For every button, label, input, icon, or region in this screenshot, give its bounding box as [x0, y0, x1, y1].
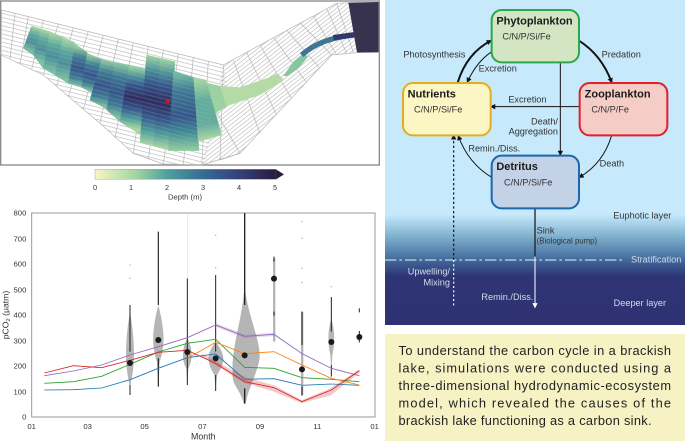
- axis labels: 600: [14, 260, 26, 269]
- axis labels: 11: [313, 422, 321, 431]
- box: Nutrients: C/N/P/Si/Fe: [414, 104, 462, 114]
- axis labels: 09: [256, 422, 264, 431]
- summary text box: three-dimensional hydrodynamic-ecosystem: [398, 378, 671, 393]
- violins: [126, 258, 334, 403]
- observation means: [127, 276, 362, 372]
- depth patches: [23, 26, 355, 151]
- stratification line: [385, 258, 625, 262]
- deep layer labels: Remin./Diss.: [481, 292, 533, 302]
- summary text box: To understand the carbon cycle in a brackish: [398, 343, 671, 358]
- outlet dark cells: [348, 2, 379, 53]
- summary text box: brackish lake functioning as a carbon sink.: [398, 413, 652, 428]
- axis labels: [1, 209, 379, 441]
- colorbar: 0: [93, 183, 97, 192]
- box: Detritus: Detritus: [496, 161, 538, 173]
- plot frame: [32, 213, 375, 417]
- series lines: [44, 325, 359, 402]
- flow labels: Euphotic layer: [613, 211, 671, 221]
- colorbar: 3: [201, 183, 205, 192]
- axis labels: 700: [14, 234, 26, 243]
- flow labels: Death: [600, 158, 624, 168]
- colorbar: 2: [165, 183, 169, 192]
- axis labels: 01: [27, 422, 36, 431]
- flow labels: Aggregation: [509, 127, 558, 137]
- water background: [385, 0, 685, 325]
- axis labels: 03: [83, 422, 92, 431]
- flow labels: (Biological pump): [537, 237, 598, 246]
- series shading: [202, 325, 359, 402]
- axis labels: 2: [6, 318, 12, 321]
- map frame: [1, 1, 379, 165]
- deep layer labels: Deeper layer: [614, 298, 666, 308]
- lake mesh: [0, 3, 357, 165]
- box: Detritus: [492, 156, 579, 208]
- box: Zooplankton: C/N/P/Fe: [591, 104, 629, 114]
- axis labels: 200: [14, 362, 26, 371]
- deep layer labels: [408, 254, 681, 308]
- flow labels: Photosynthesis: [403, 50, 466, 60]
- axis labels: (µatm): [1, 291, 11, 318]
- deep layer labels: Upwelling/: [408, 267, 450, 277]
- flow labels: [403, 50, 671, 246]
- axis labels: 400: [14, 311, 26, 320]
- colorbar: 4: [237, 183, 241, 192]
- box: Nutrients: Nutrients: [408, 88, 456, 100]
- box: Phytoplankton: C/N/P/Si/Fe: [502, 31, 551, 41]
- flow labels: Remin./Diss.: [468, 144, 520, 154]
- colorbar: [93, 169, 284, 202]
- flow labels: Predation: [602, 50, 641, 60]
- box: Nutrients: [403, 83, 491, 135]
- panel: lake depth map: [0, 1, 379, 202]
- axis labels: 100: [14, 387, 26, 396]
- box: Zooplankton: Zooplankton: [585, 88, 651, 100]
- patch mesh overlay: [23, 26, 220, 151]
- deep layer labels: Stratification: [631, 254, 681, 264]
- flow labels: Sink: [537, 226, 555, 236]
- box: Phytoplankton: Phytoplankton: [496, 15, 573, 27]
- axis labels: 05: [140, 422, 149, 431]
- red site marker: [166, 99, 170, 103]
- axis labels: 800: [14, 209, 26, 218]
- colorbar: 1: [129, 183, 133, 192]
- axis labels: 300: [14, 336, 26, 345]
- axis labels: pCO: [1, 321, 11, 339]
- summary text box: lake, simulations were conducted using a: [398, 360, 672, 376]
- box: Detritus: C/N/P/Si/Fe: [504, 177, 552, 187]
- violin whiskers: [130, 213, 359, 404]
- panel: ecosystem diagram: [385, 0, 685, 325]
- flow labels: Excretion: [508, 95, 547, 105]
- outlier points: [129, 221, 332, 287]
- axis labels: 500: [14, 285, 26, 294]
- arrows: [454, 41, 612, 307]
- colorbar: 5: [273, 183, 277, 192]
- flow labels: Death/: [531, 116, 558, 126]
- colorbar: Depth (m): [168, 193, 202, 202]
- axis labels: 07: [198, 422, 207, 431]
- flow labels: Excretion: [479, 64, 517, 74]
- box: Phytoplankton: [492, 10, 579, 62]
- summary text box: [385, 334, 685, 441]
- axis labels: 01: [370, 422, 379, 431]
- axis labels: 0: [22, 413, 26, 422]
- deep layer labels: Mixing: [424, 278, 450, 288]
- chart: pCO2 by month: [1, 209, 379, 441]
- box: Zooplankton: [580, 83, 667, 135]
- summary text box: model, which revealed the causes of the: [398, 396, 671, 410]
